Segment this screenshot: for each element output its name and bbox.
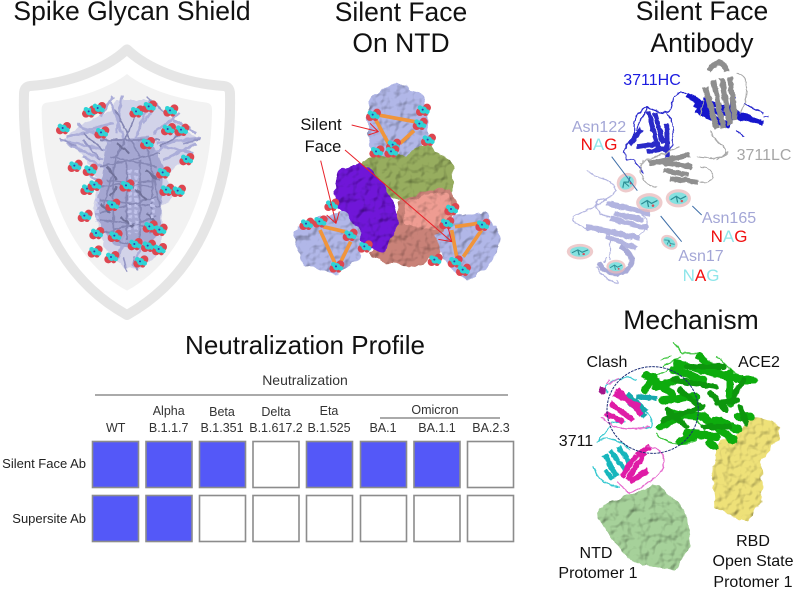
variant column headers: Eta	[320, 404, 338, 418]
label: silent face: Silent	[300, 116, 342, 134]
ribbon: top antibody constant domain	[635, 63, 768, 160]
variant column headers	[106, 403, 510, 435]
label: Asn122: Asn122	[572, 119, 626, 136]
panel: spike glycan shield	[13, 0, 251, 315]
glycans on NTD	[299, 104, 490, 276]
ribbon: antibody with glycans	[567, 63, 768, 283]
orange silent face triangles	[320, 115, 482, 263]
label: NAG for Asn17: NAG	[683, 266, 719, 285]
panel: mechanism	[558, 305, 794, 590]
panel: neutralization profile	[2, 330, 514, 542]
variant column headers: BA.2.3	[472, 421, 510, 435]
variant column headers: Delta	[261, 405, 291, 419]
surface: RBD yellow	[716, 420, 777, 518]
label: 3711: 3711	[559, 433, 593, 450]
label: NTD protomer 1: NTD	[580, 545, 612, 562]
label: NAG for Asn165: NAG	[711, 227, 747, 246]
title: silent face on NTD: On NTD	[352, 28, 450, 58]
table header: neutralization: Neutralization	[262, 372, 348, 388]
variant column headers: BA.1.1	[418, 421, 456, 435]
leader lines	[612, 157, 702, 242]
surface: salmon protomer	[373, 192, 455, 263]
surface: right lavender lobe	[440, 217, 498, 277]
shield outline	[24, 49, 230, 315]
label: NAG for Asn122: NAG	[581, 135, 617, 154]
shield inner fill	[42, 74, 212, 291]
variant column headers: Omicron	[411, 403, 459, 417]
surface: left lavender lobe	[297, 217, 358, 272]
surface: top lavender lobe	[371, 86, 425, 152]
variant column headers: Alpha	[153, 404, 185, 418]
variant column headers: B.1.351	[200, 421, 244, 435]
row: supersite ab	[12, 496, 514, 542]
row: silent face ab	[2, 442, 514, 488]
variant column headers: Beta	[209, 405, 235, 419]
label: ACE2: ACE2	[738, 354, 780, 371]
ribbon: heavy chain variable domain	[624, 107, 674, 173]
spike protein trimer	[60, 95, 200, 272]
surface: NTD green	[602, 488, 687, 567]
ribbon: NTD	[573, 170, 650, 283]
glycans with transparent surface	[567, 169, 691, 274]
label: 3711LC: 3711LC	[737, 147, 791, 164]
molecule: NTD trimer surface	[297, 86, 498, 277]
ribbon: 3711 lower domain	[593, 427, 664, 493]
panel: silent face on NTD	[297, 0, 498, 277]
variant column headers: BA.1	[369, 421, 397, 435]
label: silent face: Face	[305, 138, 341, 156]
surface: green protomer	[367, 148, 450, 200]
panel: silent face antibody	[567, 0, 791, 285]
red arrows to silent face	[321, 123, 452, 242]
row: supersite ab: Supersite Ab	[12, 511, 86, 526]
icon: shield with spike protein	[24, 49, 230, 315]
label: RBD open state protomer 1: RBD	[736, 533, 770, 550]
ribbon: 3711 upper domain	[601, 378, 658, 429]
label: Asn165: Asn165	[702, 210, 756, 227]
ribbon: ACE2 green	[645, 342, 753, 447]
surface: salmon protomer highlight	[407, 195, 452, 227]
title: silent face antibody: Antibody	[650, 28, 754, 58]
title: mechanism: Mechanism	[623, 305, 759, 335]
molecule: mechanism structure	[593, 342, 777, 567]
label: Asn17: Asn17	[678, 248, 724, 265]
title: neutralization profile: Neutralization Profile	[185, 330, 425, 360]
surface: purple protomer	[338, 167, 395, 248]
label: 3711HC: 3711HC	[623, 72, 681, 89]
label: RBD open state protomer 1: Open State	[713, 553, 794, 570]
variant column headers: B.1.617.2	[249, 421, 303, 435]
glycans	[56, 100, 194, 268]
variant column headers: WT	[106, 421, 126, 435]
variant column headers: B.1.1.7	[149, 421, 189, 435]
label: clash: Clash	[587, 354, 627, 371]
row: silent face ab: Silent Face Ab	[2, 456, 86, 471]
variant column headers: B.1.525	[307, 421, 351, 435]
ribbon: light chain variable domain	[640, 147, 728, 187]
label: NTD protomer 1: Protomer 1	[558, 565, 638, 582]
clash circle	[607, 367, 698, 453]
